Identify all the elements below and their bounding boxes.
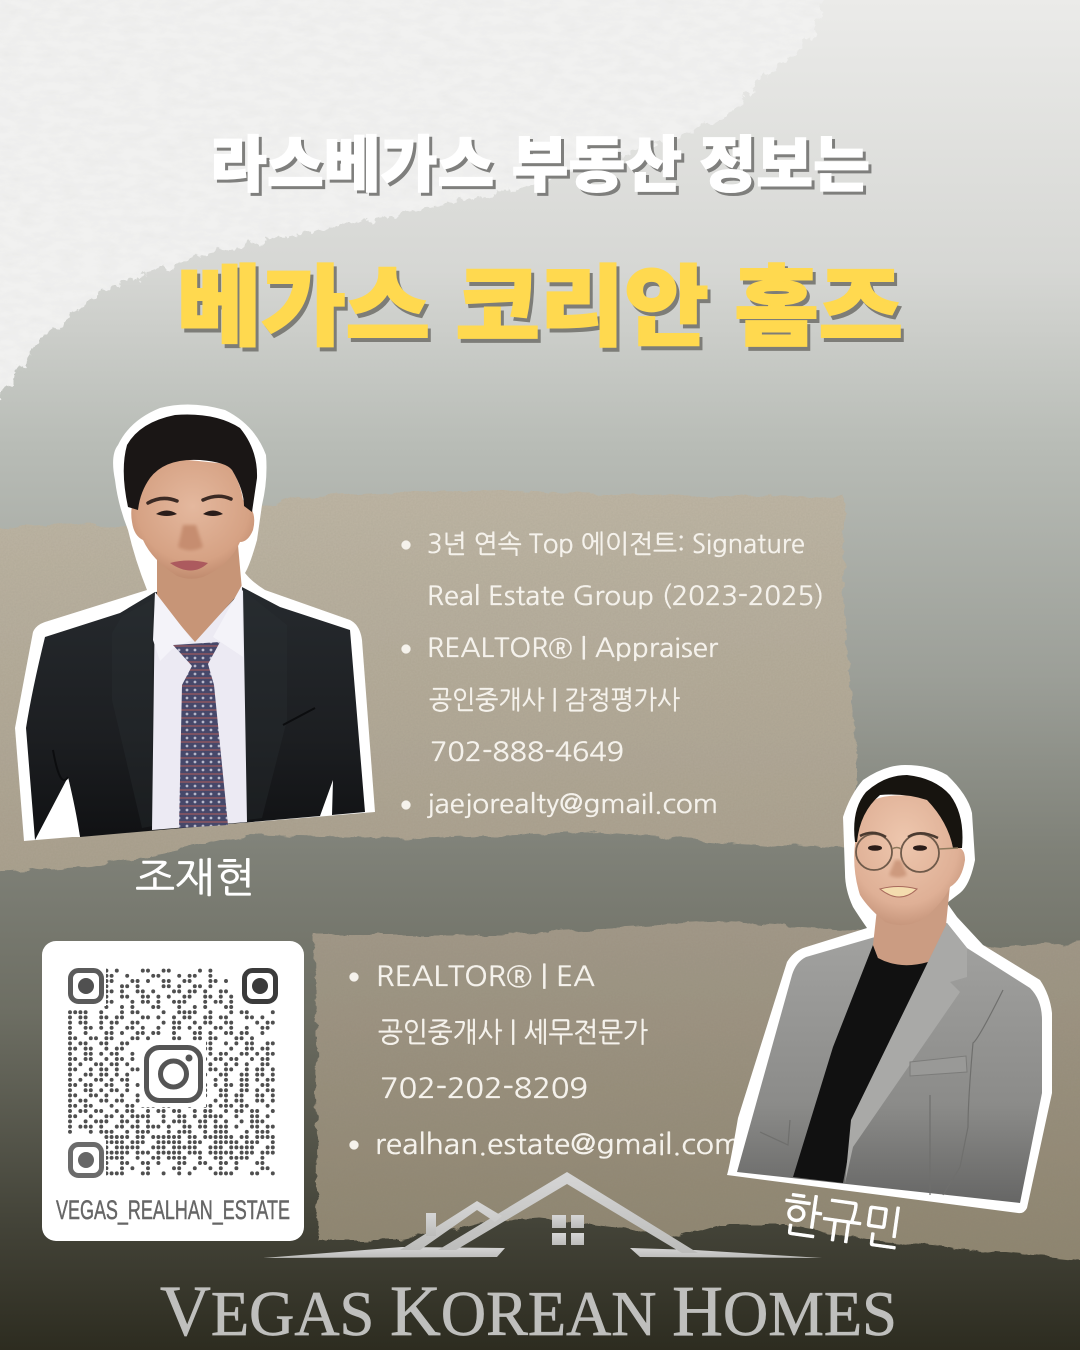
title line: 라스베가스 부동산 정보는 (213, 118, 873, 207)
icon: instagram (146, 1048, 200, 1100)
face (854, 795, 965, 925)
small roof (400, 1201, 502, 1250)
agent 1 details text: jaejorealty@gmail.com (427, 791, 718, 819)
bullet (402, 540, 410, 550)
chimney (426, 1213, 436, 1236)
name: 조재현: 조재현 (135, 857, 255, 898)
portrait: 한규민 (727, 765, 1052, 1213)
agent 1 details text (402, 531, 824, 819)
QR card (42, 941, 304, 1241)
torn paper panel 2 (315, 922, 1080, 1262)
hair (854, 775, 962, 848)
agent 2 details text: realhan.estate@gmail.com (375, 1131, 741, 1159)
facial features (148, 496, 231, 570)
main roof (438, 1172, 698, 1253)
main heading: 베가스 코리안 홈즈 (177, 237, 903, 364)
collar (153, 585, 243, 661)
handle label: VEGAS_REALHAN_ESTATE (56, 1195, 290, 1225)
agent 1 details text: REALTOR® | Appraiser (427, 635, 719, 661)
hair (124, 415, 257, 512)
center clearing (140, 1041, 206, 1107)
lapel (845, 923, 967, 1183)
QR dots (70, 971, 278, 1173)
tie (173, 642, 228, 828)
agent 2 details text: REALTOR® | EA (376, 963, 595, 991)
agent 1 details text: 702-888-4649 (430, 739, 624, 765)
white sticker outline (727, 765, 1052, 1213)
neck (873, 885, 950, 965)
agent 2 details text: 702-202-8209 (380, 1075, 588, 1103)
black t-shirt (793, 945, 928, 1183)
suit (26, 587, 365, 840)
agent 2 details text: 공인중개사 | 세무전문가 (378, 1018, 649, 1047)
arm gap left (68, 777, 80, 837)
agent 1 details text: 3년 연속 Top 에이전트: Signature (427, 531, 805, 557)
windows (552, 1215, 566, 1228)
agent 1 details text: Real Estate Group (2023-2025) (427, 583, 824, 609)
portrait: 조재현 (15, 404, 375, 841)
name: 한규민: 한규민 (778, 1190, 906, 1253)
main heading: 베가스 코리안 홈즈 (180, 241, 906, 368)
logo: house (263, 1172, 822, 1258)
shirt (152, 590, 247, 830)
torn paper panel 1 (0, 490, 857, 873)
agent 2 details text (350, 963, 741, 1159)
base swoosh (263, 1247, 822, 1258)
pocket and sleeve creases (910, 1056, 967, 1076)
face (131, 458, 254, 579)
agent 1 details text: 공인중개사 | 감정평가사 (429, 687, 680, 713)
suit lapel and pocket shading (112, 590, 287, 828)
logo wordmark: VEGAS KOREAN HOMES (160, 1271, 897, 1350)
neck (157, 545, 242, 642)
torn white paper top-left (0, 0, 828, 415)
white sticker outline (15, 404, 375, 841)
gray jacket (737, 923, 1042, 1203)
glasses and features (856, 833, 958, 897)
finder corners (66, 966, 280, 1180)
title line: 라스베가스 부동산 정보는 (210, 115, 870, 204)
